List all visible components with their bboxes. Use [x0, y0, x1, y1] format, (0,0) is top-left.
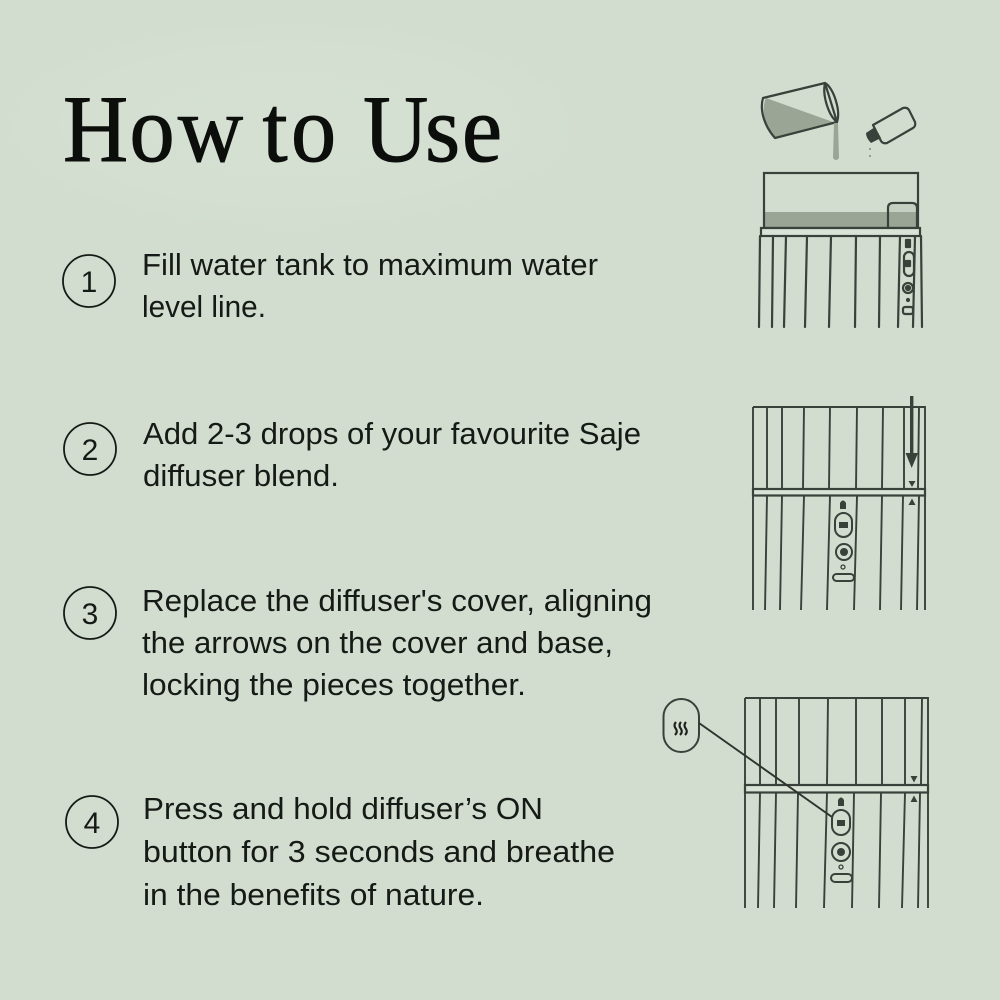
alignment arrows: [908, 481, 916, 505]
step 2 text: diffuser blend.: [143, 458, 339, 493]
diffuser base: [753, 496, 925, 610]
step 2 number badge: 2: [82, 434, 98, 467]
step 1 number badge: 1: [81, 266, 97, 299]
step 4 number badge: 4: [84, 807, 100, 840]
step 2 text: Add 2-3 drops of your favourite Saje: [143, 416, 641, 451]
icon: pouring beaker: [762, 83, 839, 160]
step 1 text: level line.: [142, 289, 266, 324]
illustration: filling the tank: [759, 83, 922, 327]
diffuser cover: [745, 698, 928, 784]
collar band: [753, 489, 925, 496]
diffuser base: [745, 793, 928, 908]
step 1: [63, 247, 598, 324]
step 3 text: locking the pieces together.: [142, 667, 526, 702]
callout: ON button enlarged: [664, 699, 699, 752]
title: How to Use: [63, 77, 502, 183]
illustration: pressing ON button: [664, 698, 928, 908]
step 1 number badge: [63, 255, 115, 307]
arrow: press cover down: [906, 396, 918, 468]
step 4 text: button for 3 seconds and breathe: [143, 834, 615, 869]
step 2 number badge: [64, 423, 116, 475]
step 3 text: [142, 583, 652, 702]
step 3 text: Replace the diffuser's cover, aligning: [142, 583, 652, 618]
control panel: [831, 798, 852, 882]
step 4: [66, 791, 615, 912]
step 4 text: in the benefits of nature.: [143, 877, 484, 912]
illustration: replacing the cover: [753, 396, 925, 610]
step 3 text: the arrows on the cover and base,: [142, 625, 613, 660]
callout leader line: [699, 723, 832, 817]
step 4 number badge: [66, 796, 118, 848]
diffuser base: [759, 236, 922, 327]
icon: oil bottle with drops: [866, 108, 915, 157]
diffuser cover: [753, 407, 925, 488]
step 2: [64, 416, 641, 493]
water tank: [761, 173, 920, 236]
alignment arrows: [910, 776, 918, 802]
step 2 text: [143, 416, 641, 493]
step 3: [64, 583, 652, 702]
step 4 text: Press and hold diffuser’s ON: [143, 791, 543, 826]
step 4 text: [143, 791, 615, 912]
collar band: [745, 785, 928, 792]
step 3 number badge: [64, 587, 116, 639]
step 3 number badge: 3: [82, 598, 98, 631]
step 1 text: Fill water tank to maximum water: [142, 247, 598, 282]
step 1 text: [142, 247, 598, 324]
control panel: [833, 500, 854, 581]
